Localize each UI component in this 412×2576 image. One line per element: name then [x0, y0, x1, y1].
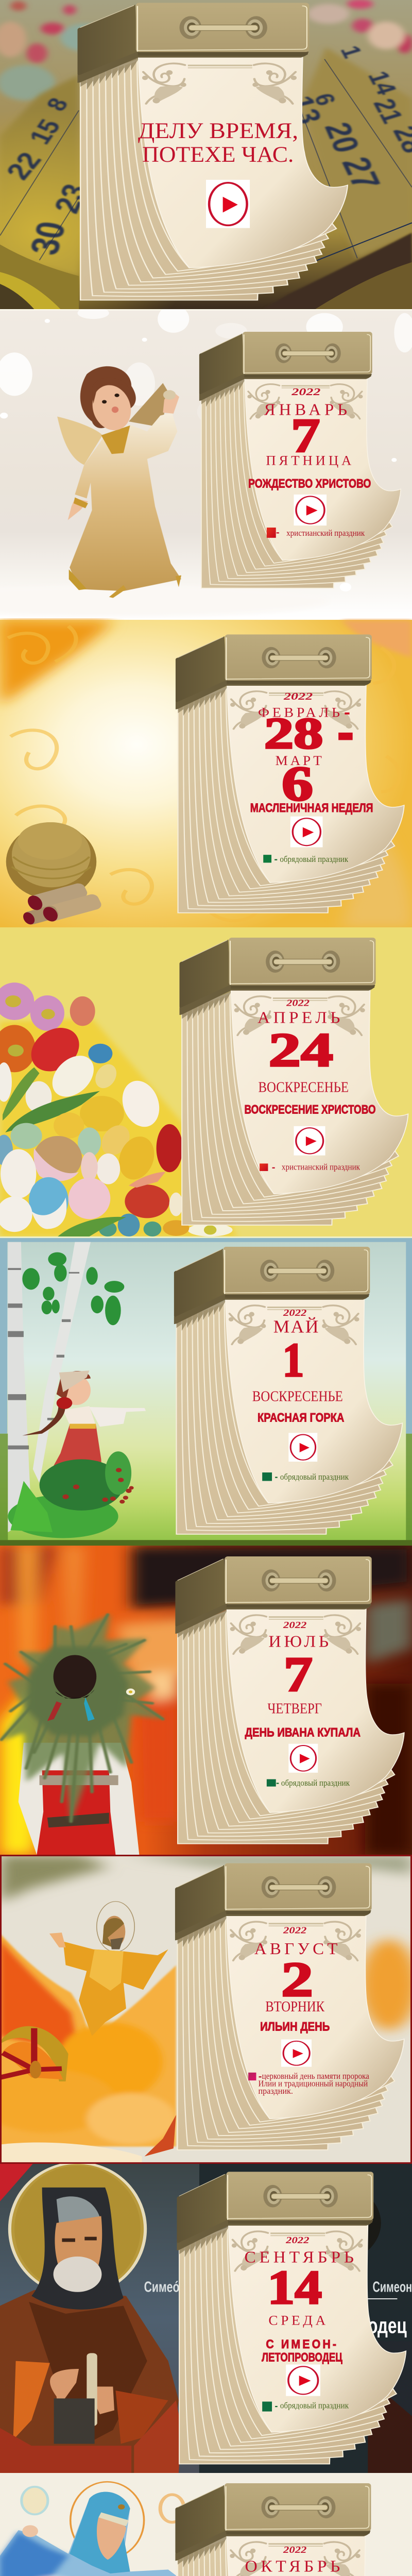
date text: February 28 to March 6: 28 — [264, 708, 323, 757]
date text: September 14 — [244, 2235, 357, 2364]
date text: September 14: 2022 — [285, 2235, 310, 2245]
icon: play button — [206, 180, 250, 228]
background numbers on the dial — [0, 43, 412, 258]
title: proverb: ПОТЕХЕ ЧАС. — [142, 142, 294, 167]
background: yellow — [0, 927, 412, 1236]
panel: Ilya's Day — [0, 1855, 412, 2164]
illustration: angel figurine — [57, 366, 181, 598]
panel: Ivan Kupala — [0, 1546, 412, 1855]
legend: ritual holiday — [262, 1472, 349, 1482]
icon: play button — [294, 1126, 325, 1156]
illustration: pancakes on a plate — [6, 822, 103, 928]
date text: January 7: ЯНВАРЬ — [264, 401, 351, 419]
background numbers on the dial: 30 — [22, 218, 74, 258]
date text: May 1: 1 — [282, 1333, 304, 1386]
date text: February 28 to March 6 — [250, 691, 373, 815]
background: clouds and flames — [0, 1855, 412, 2164]
date text: February 28 to March 6: 2022 — [283, 691, 313, 702]
calendar: August page — [175, 1863, 404, 2150]
background numbers on the dial: 14 — [362, 68, 402, 98]
date text: October 14: ОКТЯБРЬ — [245, 2557, 344, 2575]
calendar: October page — [175, 2483, 403, 2576]
date text: February 28 to March 6: ФЕВРАЛЬ — [258, 705, 343, 720]
date text: August 2: АВГУСТ — [254, 1940, 341, 1958]
calendar: April page — [179, 938, 408, 1225]
icon: play button — [286, 2365, 320, 2396]
date text: September 14: СЕНТЯБРЬ — [244, 2248, 357, 2266]
legend: ritual holiday — [267, 1778, 350, 1788]
illustration: chariot wheel — [0, 2026, 68, 2081]
background: golden ornament — [0, 618, 412, 927]
calendar: September page — [177, 2172, 406, 2464]
panel: Easter — [0, 927, 412, 1236]
legend: christian holiday: христианский праздник — [286, 529, 365, 538]
date text: October 14 — [245, 2545, 350, 2576]
date text: September 14: С ИМЕОН- — [266, 2337, 338, 2351]
legend: ritual holiday — [263, 855, 348, 864]
date text: August 2: ВТОРНИК — [265, 1999, 325, 2015]
background numbers on the dial: 1 — [335, 43, 368, 61]
date text: May 1: ВОСКРЕСЕНЬЕ — [252, 1388, 343, 1404]
calendar: January page — [199, 332, 401, 588]
background: fire streaks — [0, 1546, 412, 1855]
date text: January 7: 7 — [291, 409, 320, 462]
legend: ritual holiday: обрядовый праздник — [280, 2401, 349, 2411]
background numbers on the dial: 15 — [23, 115, 67, 148]
legend: ritual holiday — [262, 2401, 349, 2412]
legend: ritual holiday: обрядовый праздник — [281, 1778, 350, 1788]
panel: Simeon the Summer-Leader — [0, 2164, 412, 2473]
legend: christian holiday — [260, 1162, 360, 1172]
background: slate icon backdrop — [0, 2164, 412, 2473]
background numbers on the dial: 6 — [308, 91, 341, 108]
title: proverb: ДЕЛУ ВРЕМЯ, — [138, 119, 298, 143]
caption: background name on the icon — [144, 2279, 412, 2338]
background: spring sky and grass — [0, 1236, 412, 1546]
frame: dark red border — [1, 1856, 411, 2163]
date text: September 14: 14 — [267, 2261, 322, 2314]
illustration: Theotokos with veil — [0, 2482, 184, 2576]
icon: play button — [290, 817, 323, 848]
date text: August 2: ИЛЬИН ДЕНЬ — [260, 2020, 330, 2033]
date text: August 2 — [254, 1925, 341, 2033]
background numbers on the dial: 21 — [367, 95, 409, 127]
icon: play button — [294, 495, 327, 526]
caption: background name on the icon: Симеó — [144, 2279, 179, 2296]
calendar: May page — [174, 1247, 402, 1534]
legend: christian holiday — [267, 528, 365, 538]
title: proverb — [138, 119, 298, 167]
background numbers on the dial: 8 — [41, 94, 74, 114]
illustration: girl in sarafan — [22, 1370, 146, 1520]
date text: July 7: 7 — [284, 1648, 313, 1702]
calendar: July page — [175, 1556, 404, 1844]
background numbers on the dial: 13 — [283, 92, 329, 127]
date text: January 7: 2022 — [291, 386, 321, 398]
date text: May 1: КРАСНАЯ ГОРКА — [258, 1411, 344, 1425]
date text: May 1: МАЙ — [273, 1317, 320, 1336]
date text: April 24: ВОСКРЕСЕНЬЕ — [259, 1079, 349, 1095]
background numbers on the dial: 23 — [47, 181, 95, 217]
legend: ritual holiday: обрядовый праздник — [280, 855, 348, 864]
illustration: eggs, tulips and flowers — [0, 982, 236, 1236]
date text: August 2: 2022 — [283, 1925, 307, 1936]
background: calendar dial photo — [0, 0, 412, 309]
date text: April 24 — [244, 998, 376, 1116]
illustration: woman with herb wreath — [2, 1615, 164, 1855]
date text: January 7: ПЯТНИЦА — [266, 453, 354, 468]
background numbers on the dial: 20 — [317, 118, 367, 156]
icon: play button — [288, 1744, 318, 1773]
date text: September 14: ЛЕТОПРОВОДЕЦ — [262, 2350, 342, 2364]
background numbers on the dial: 27 — [334, 153, 388, 194]
panel: Intercession of the Theotokos — [0, 2473, 412, 2576]
icon: play button — [288, 1433, 317, 1462]
date text: October 14: 2022 — [283, 2545, 307, 2555]
background: watercolor paper — [0, 2473, 412, 2576]
date text: July 7: ИЮЛЬ — [268, 1633, 332, 1651]
date text: April 24: АПРЕЛЬ — [258, 1009, 344, 1027]
legend: christian holiday: христианский праздник — [282, 1162, 360, 1172]
illustration: birch trees — [8, 1242, 124, 1532]
background: snow with bokeh — [0, 305, 412, 618]
calendar: tear-off pad — [78, 3, 348, 300]
calendar: February/March page — [176, 634, 404, 913]
illustration: prophet Elijah — [49, 1902, 168, 2036]
panel: Krasnaya Gorka — [0, 1236, 412, 1546]
legend: church and folk holiday — [248, 2072, 369, 2096]
date text: July 7 — [245, 1620, 360, 1739]
illustration: berry bush — [8, 1451, 134, 1538]
date text: May 1: 2022 — [283, 1308, 307, 1318]
date text: September 14: СРЕДА — [268, 2313, 329, 2328]
background numbers on the dial: 22 — [0, 148, 48, 184]
date text: July 7: ЧЕТВЕРГ — [267, 1701, 322, 1717]
icon: play button — [281, 2040, 312, 2067]
date text: April 24: 24 — [268, 1023, 333, 1076]
date text: July 7: 2022 — [283, 1620, 307, 1630]
date text: May 1 — [252, 1308, 344, 1425]
date text: February 28 to March 6: 6 — [282, 757, 313, 811]
panel: Maslenitsa — [0, 618, 412, 927]
legend: church and folk holiday: праздник. — [259, 2087, 293, 2096]
date text: April 24: 2022 — [286, 998, 310, 1008]
date text: August 2: 2 — [281, 1953, 313, 2007]
date text: January 7 — [248, 386, 371, 490]
legend: ritual holiday: обрядовый праздник — [280, 1472, 349, 1482]
illustration: icon of Saint Simeon — [0, 2163, 181, 2473]
date text: February 28 to March 6: МАРТ — [276, 753, 324, 768]
